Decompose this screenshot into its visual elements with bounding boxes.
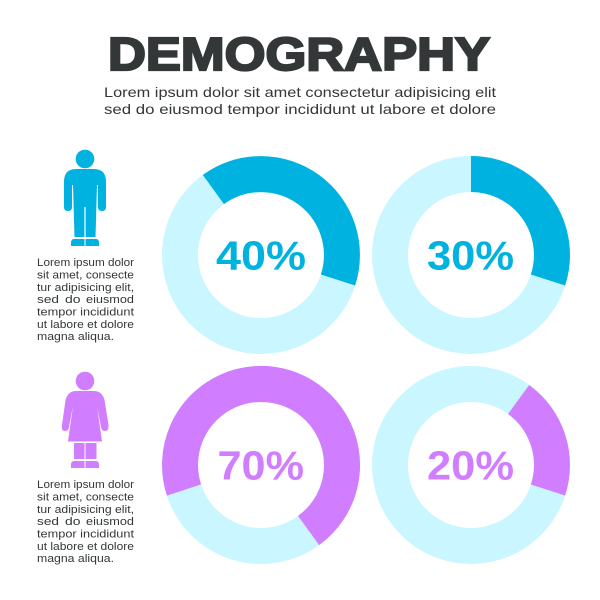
female description: tempor incididunt [37,528,134,540]
subtitle: Lorem ipsum dolor sit amet consectetur adipisicing elit [104,84,496,100]
donut chart: 40% [180,174,342,336]
male description: Lorem ipsum dolor [37,257,134,269]
male description: magna aliqua. [37,331,114,343]
donut chart: 30% [390,174,552,336]
male description: ut labore et dolore [37,319,134,331]
donut chart: 70%: 70% [218,442,304,488]
female description: do [65,516,80,528]
donut chart: 20% [390,384,552,546]
male description: tur adipisicing elit, [37,282,134,294]
male description [37,257,134,343]
male description: sed [37,294,59,306]
icon: female figure [62,372,109,468]
female description: eiusmod [86,516,134,528]
male description: tempor incididunt [37,306,134,318]
female description: sed [37,516,59,528]
female description: sit amet, consecte [37,492,134,504]
female description [37,479,134,565]
subtitle [104,84,496,117]
female description: tur adipisicing elit, [37,504,134,516]
male description: sit amet, consecte [37,270,134,282]
icon: male figure [64,150,106,246]
donut chart: 30%: 30% [427,232,514,278]
title: DEMOGRAPHY [108,28,490,80]
subtitle: sed do eiusmod tempor incididunt ut labore et dolore [104,101,496,117]
female description: magna aliqua. [37,553,114,565]
male description: eiusmod [86,294,134,306]
donut chart: 40%: 40% [216,232,306,278]
male description: do [65,294,80,306]
donut chart: 20%: 20% [427,442,514,488]
female description: ut labore et dolore [37,541,134,553]
female description: Lorem ipsum dolor [37,479,134,491]
donut chart: 70% [180,384,342,546]
